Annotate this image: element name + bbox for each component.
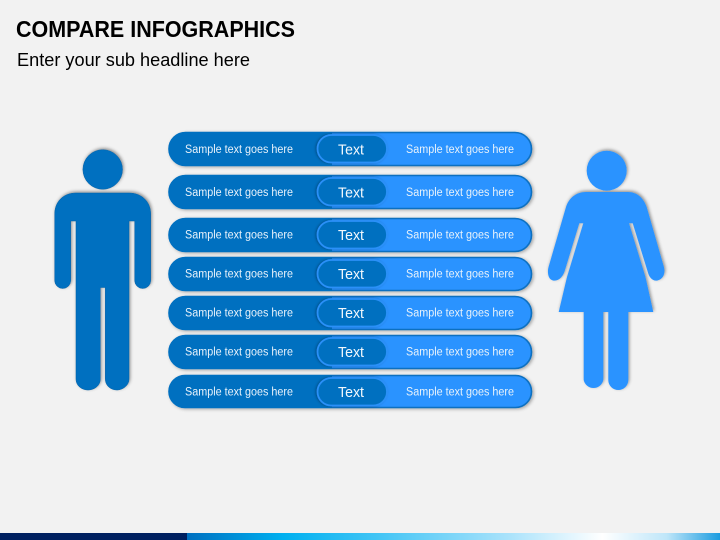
icon: woman <box>548 151 664 390</box>
bar row 3: Sample text goes here <box>406 229 514 241</box>
bar row 7 <box>168 375 532 408</box>
bar row 4: Sample text goes here <box>406 268 514 280</box>
bar row 6: Sample text goes here <box>185 346 293 358</box>
bar row 4: Text <box>338 266 365 283</box>
bar row 3 <box>168 218 532 252</box>
bar row 5 <box>168 296 532 330</box>
bar row 5: Sample text goes here <box>185 307 293 319</box>
bar row 7: Sample text goes here <box>185 386 293 398</box>
icon: man <box>55 150 151 390</box>
bar row 1 <box>168 132 532 166</box>
bar row 4: Sample text goes here <box>185 268 293 280</box>
bar row 2 <box>168 175 532 209</box>
bar row 1: Text <box>338 141 365 158</box>
comparison bars <box>168 132 532 408</box>
bar row 1: Sample text goes here <box>185 144 293 156</box>
bar row 7: Sample text goes here <box>406 386 514 398</box>
bar row 6: Text <box>338 344 365 361</box>
subtitle: Enter your sub headline here <box>17 49 250 70</box>
bar row 2: Text <box>338 184 365 201</box>
bar row 6 <box>168 335 532 369</box>
bar row 3: Text <box>338 227 365 244</box>
bar row 5: Sample text goes here <box>406 307 514 319</box>
bar row 6: Sample text goes here <box>406 346 514 358</box>
bar row 4 <box>168 257 532 291</box>
bar row 7: Text <box>338 384 365 401</box>
bar row 5: Text <box>338 305 365 322</box>
bar row 3: Sample text goes here <box>185 229 293 241</box>
title: COMPARE INFOGRAPHICS <box>16 16 295 42</box>
footer colour strip <box>0 533 720 540</box>
bar row 2: Sample text goes here <box>185 187 293 199</box>
bar row 1: Sample text goes here <box>406 144 514 156</box>
bar row 2: Sample text goes here <box>406 187 514 199</box>
